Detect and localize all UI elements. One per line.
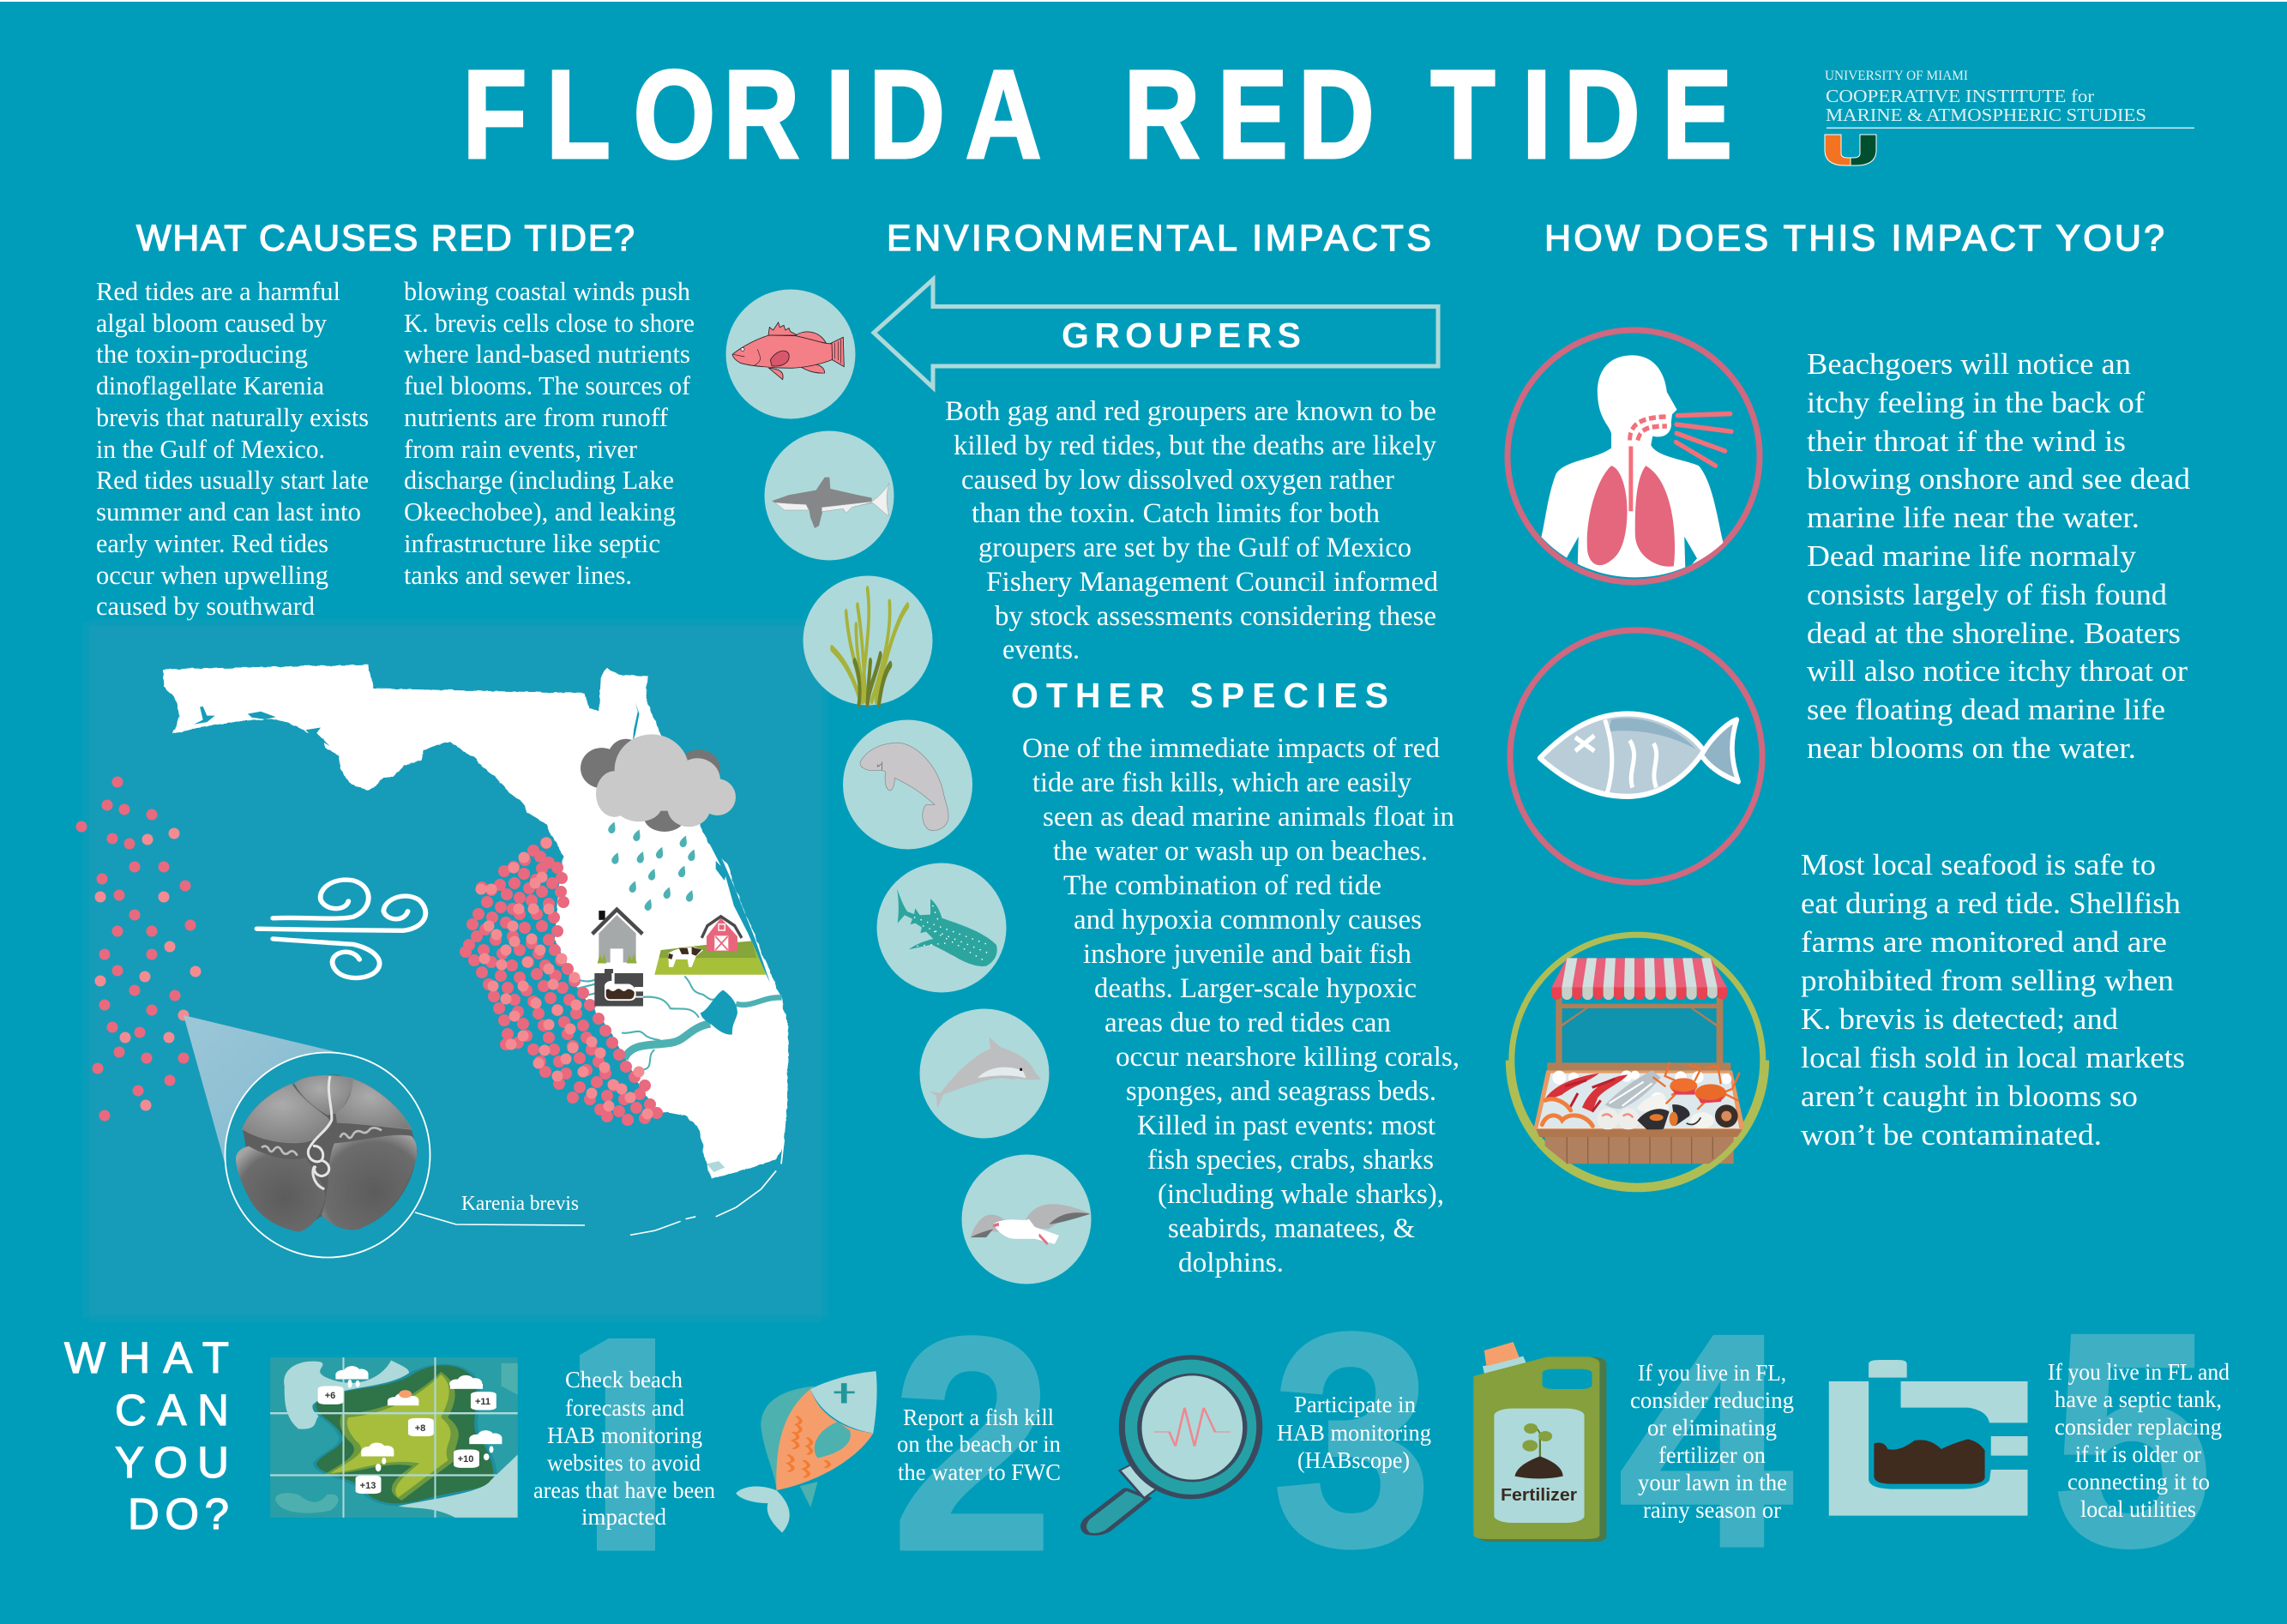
text block: other species: fish species, crabs, sharks <box>1147 1145 1434 1176</box>
text block: beachgoers: blowing onshore and see dead <box>1807 462 2191 496</box>
text block: causes column 1: caused by southward <box>96 591 315 621</box>
icon: forecast map: +10 <box>458 1454 473 1465</box>
icon: person with irritated airways <box>1508 330 1760 586</box>
map: Florida <box>163 665 789 1235</box>
text block: seafood: K. brevis is detected; and <box>1801 1002 2119 1036</box>
text block: groupers: events. <box>1002 635 1080 665</box>
heading: environmental impacts: ENVIRONMENTAL IMPACTS <box>887 218 1431 259</box>
text block: beachgoers: marine life near the water. <box>1807 501 2140 534</box>
icon: magnifying glass <box>1084 1355 1262 1534</box>
map: rain cloud <box>581 734 736 911</box>
heading: what can you do: DO? <box>128 1489 229 1538</box>
text block: step 2 <box>897 1404 1061 1485</box>
text block: other species: The combination of red tide <box>1063 870 1381 901</box>
icon: septic tank <box>1829 1360 2031 1516</box>
logo: University of Miami CIMAS: UNIVERSITY OF MIAMI <box>1825 69 1968 83</box>
heading: groupers: GROUPERS <box>1062 316 1301 355</box>
text block: causes column 2: from rain events, river <box>404 434 638 464</box>
text block: causes column 1: dinoflagellate Karenia <box>96 370 324 400</box>
heading: other species: OTHER SPECIES <box>1011 676 1388 715</box>
map: barn, field and cow <box>654 917 766 975</box>
text block: groupers: Fishery Management Council informed <box>986 567 1438 598</box>
text block: step 1 <box>533 1367 715 1530</box>
number 4: 4 <box>1617 1270 1796 1610</box>
text block: step 4 <box>1630 1360 1794 1523</box>
text block: beachgoers: near blooms on the water. <box>1807 731 2136 765</box>
heading: what causes red tide: WHAT CAUSES RED TIDE? <box>136 218 635 259</box>
text block: causes column 2: nutrients are from runoff <box>404 402 669 432</box>
map: scattered offshore cells <box>81 782 196 1116</box>
text block: seafood <box>1801 848 2185 1152</box>
text block: other species: occur nearshore killing corals, <box>1116 1042 1459 1073</box>
text block: other species: (including whale sharks), <box>1158 1179 1444 1210</box>
map: house <box>593 910 642 964</box>
text block: other species: Killed in past events: most <box>1137 1110 1435 1141</box>
text block: causes column 1: algal bloom caused by <box>96 308 327 338</box>
text block: step 1: Check beach <box>565 1367 683 1392</box>
text block: beachgoers: Beachgoers will notice an <box>1807 347 2131 381</box>
text block: causes column 2: tanks and sewer lines. <box>404 560 632 590</box>
icon: forecast map: +11 <box>475 1397 491 1407</box>
text block: other species: One of the immediate impacts of red <box>1022 733 1440 764</box>
text block: other species: the water or wash up on beaches. <box>1053 836 1428 867</box>
text block: step 3 <box>1277 1392 1431 1473</box>
text block: other species: inshore juvenile and bait fish <box>1083 939 1411 970</box>
icon: fertilizer jug <box>1473 1342 1606 1542</box>
text block: beachgoers: will also notice itchy throat or <box>1807 654 2188 688</box>
arrow: groupers <box>874 280 1438 388</box>
text block: step 3: HAB monitoring <box>1277 1420 1431 1446</box>
icon: fertilizer jug: Fertilizer <box>1501 1486 1577 1505</box>
text block: causes column 2 <box>404 276 695 590</box>
heading: what can you do: CAN <box>115 1386 229 1435</box>
text block: groupers <box>945 396 1438 665</box>
text block: other species: sponges, and seagrass beds. <box>1126 1076 1436 1107</box>
text block: other species: tide are fish kills, which are easily <box>1032 767 1411 798</box>
text block: beachgoers: Dead marine life normaly <box>1807 539 2137 573</box>
number 1: 1 <box>526 1273 719 1615</box>
text block: step 1: HAB monitoring <box>547 1423 702 1448</box>
heading: what can you do: YOU <box>115 1438 229 1487</box>
callout: Karenia brevis label <box>415 1193 585 1225</box>
heading: what can you do <box>64 1333 229 1538</box>
logo: University of Miami CIMAS <box>1825 69 2194 165</box>
text block: causes column 1: in the Gulf of Mexico. <box>96 434 325 464</box>
text block: step 1: websites to avoid <box>547 1450 701 1476</box>
title: FLORIDA RED TIDE <box>462 44 1732 184</box>
text block: other species <box>1022 733 1459 1278</box>
text block: step 2: the water to FWC <box>898 1459 1061 1485</box>
text block: groupers: groupers are set by the Gulf of Mexico <box>978 532 1411 563</box>
text block: groupers: Both gag and red groupers are known to be <box>945 396 1436 427</box>
number 3: 3 <box>1272 1270 1433 1610</box>
text block: step 5: have a septic tank, <box>2055 1386 2222 1412</box>
text block: seafood: Most local seafood is safe to <box>1801 848 2156 881</box>
text block: seafood: local fish sold in local markets <box>1801 1041 2185 1074</box>
text block: step 5: If you live in FL and <box>2048 1359 2230 1385</box>
text block: step 5 <box>2048 1359 2230 1522</box>
text block: step 3: Participate in <box>1294 1392 1416 1417</box>
text block: seafood: aren’t caught in blooms so <box>1801 1080 2138 1113</box>
text block: beachgoers: itchy feeling in the back of <box>1807 386 2145 419</box>
callout: Karenia brevis label: Karenia brevis <box>461 1193 579 1215</box>
text block: causes column 2: blowing coastal winds push <box>404 276 690 306</box>
number 2: 2 <box>891 1273 1054 1614</box>
text block: other species: dolphins. <box>1178 1248 1284 1278</box>
text block: other species: seen as dead marine animals float in <box>1043 802 1454 833</box>
icon: seagrass <box>803 576 933 705</box>
text block: seafood: farms are monitored and are <box>1801 925 2167 959</box>
text block: causes column 2: infrastructure like septic <box>404 528 660 558</box>
map: rivers and lake <box>573 977 782 1069</box>
text block: causes column 1: occur when upwelling <box>96 560 328 590</box>
icon: grouper <box>725 290 856 418</box>
map: bloom cells near the coast <box>466 843 657 1120</box>
icon: seagull <box>962 1154 1091 1284</box>
magnifier: Karenia brevis micrograph <box>225 1053 430 1257</box>
text block: step 4: fertilizer on <box>1658 1442 1766 1468</box>
icon: manatee <box>843 720 972 849</box>
text block: step 5: connecting it to <box>2067 1469 2210 1495</box>
text block: groupers: by stock assessments considering these <box>995 601 1436 632</box>
text block: seafood: won’t be contaminated. <box>1801 1118 2102 1152</box>
icon: forecast map: +6 <box>325 1391 335 1401</box>
text block: step 2: Report a fish kill <box>903 1404 1054 1430</box>
text block: groupers: than the toxin. Catch limits for both <box>972 498 1380 529</box>
heading: what can you do: WHAT <box>64 1333 229 1382</box>
text block: step 4: your lawn in the <box>1638 1470 1787 1495</box>
text block: other species: seabirds, manatees, & <box>1168 1213 1415 1244</box>
text block: step 3: (HABscope) <box>1297 1447 1410 1473</box>
text block: groupers: killed by red tides, but the deaths are likely <box>954 430 1436 461</box>
logo: University of Miami CIMAS: COOPERATIVE INSTITUTE for <box>1826 86 2094 106</box>
text block: other species: deaths. Larger-scale hypoxic <box>1094 973 1417 1004</box>
text block: groupers: caused by low dissolved oxygen rather <box>961 465 1394 496</box>
panel: map background <box>86 623 825 1319</box>
text block: beachgoers <box>1807 347 2191 765</box>
text block: seafood: prohibited from selling when <box>1801 964 2174 997</box>
text block: other species: and hypoxia commonly causes <box>1074 905 1422 935</box>
text block: causes column 2: Okeechobee), and leaking <box>404 496 676 526</box>
text block: other species: areas due to red tides can <box>1104 1007 1391 1038</box>
heading: how does this impact you: HOW DOES THIS IMPACT YOU? <box>1544 218 2164 259</box>
text block: beachgoers: their throat if the wind is <box>1807 424 2126 458</box>
icon: dead fish <box>1510 630 1762 882</box>
icon: forecast map: +8 <box>415 1423 425 1434</box>
text block: step 1: forecasts and <box>565 1395 684 1421</box>
text block: step 2: on the beach or in <box>897 1431 1061 1457</box>
icon: forecast map: +13 <box>360 1481 376 1491</box>
text block: step 4: If you live in FL, <box>1638 1360 1786 1386</box>
text block: seafood: eat during a red tide. Shellfish <box>1801 887 2182 920</box>
text block: step 1: impacted <box>581 1504 666 1530</box>
number 5: 5 <box>2050 1269 2213 1609</box>
icon: shark <box>765 430 894 561</box>
text block: causes column 1: early winter. Red tides <box>96 528 328 558</box>
text block: causes column 2: where land-based nutrients <box>404 339 690 369</box>
text block: causes column 2: K. brevis cells close to shore <box>404 308 695 338</box>
map: septic tank <box>594 969 643 1007</box>
icon: forecast map <box>270 1357 518 1518</box>
icon: dolphin <box>919 1008 1050 1139</box>
text block: beachgoers: see floating dead marine life <box>1807 693 2165 726</box>
text block: beachgoers: consists largely of fish found <box>1807 578 2168 611</box>
icon: fish <box>736 1371 877 1532</box>
icon: wind <box>256 880 425 978</box>
text block: causes column 1: brevis that naturally exists <box>96 402 369 432</box>
text block: step 5: if it is older or <box>2075 1441 2201 1467</box>
text block: causes column 1: Red tides are a harmful <box>96 276 340 306</box>
text block: step 4: rainy season or <box>1643 1497 1781 1523</box>
text block: causes column 2: fuel blooms. The sources of <box>404 370 691 400</box>
text block: step 4: or eliminating <box>1647 1415 1777 1441</box>
text block: step 5: local utilities <box>2080 1496 2196 1522</box>
text block: causes column 1: summer and can last into <box>96 496 361 526</box>
text block: step 5: consider replacing <box>2055 1414 2222 1440</box>
icon: whale shark <box>876 863 1007 993</box>
text block: step 1: areas that have been <box>533 1477 715 1503</box>
logo: University of Miami CIMAS: MARINE & ATMOSPHERIC STUDIES <box>1826 105 2146 125</box>
text block: causes column 1 <box>96 276 369 621</box>
text block: causes column 1: the toxin-producing <box>96 339 308 369</box>
text block: beachgoers: dead at the shoreline. Boaters <box>1807 617 2181 650</box>
magnifier: wedge from cell to Karenia brevis <box>184 1015 340 1163</box>
text block: causes column 2: discharge (including Lake <box>404 465 674 495</box>
icon: seafood market stall <box>1508 935 1766 1189</box>
text block: causes column 1: Red tides usually start late <box>96 465 369 495</box>
text block: step 4: consider reducing <box>1630 1387 1794 1413</box>
